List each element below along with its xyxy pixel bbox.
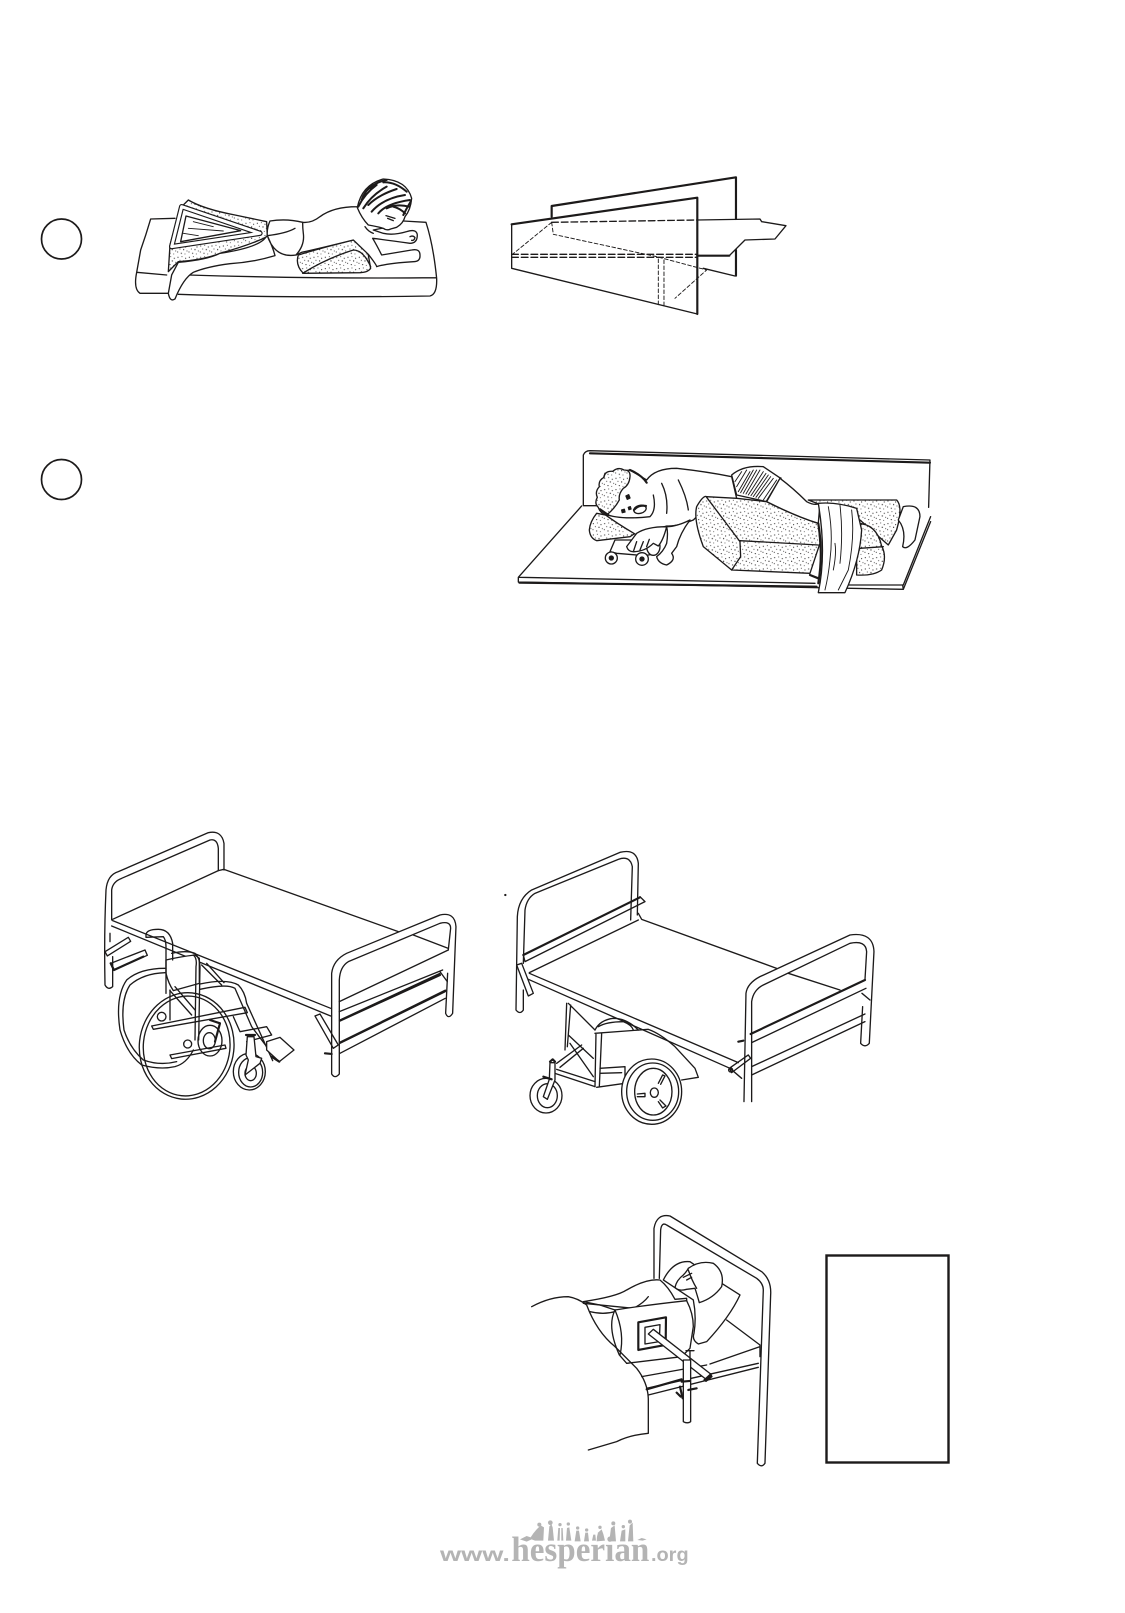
- pillow: [663, 1262, 740, 1344]
- illustration: folded cardboard pattern for abductor: [512, 177, 786, 314]
- head strap bar: [523, 897, 640, 955]
- rear wheel: [622, 1059, 682, 1124]
- square plate: [638, 1317, 666, 1350]
- wheelchair beside first bed: [119, 929, 294, 1104]
- footer logo: hesperian: [439, 1520, 689, 1569]
- front caster: [233, 1053, 265, 1090]
- logo wordmark hesperian: hesperian: [511, 1530, 650, 1569]
- number circle: step 1: [42, 219, 82, 259]
- illustration: boy lying face down on mattress with wedge and leg abductor: [136, 179, 437, 300]
- face: [633, 504, 647, 515]
- boy body and leg: [168, 205, 420, 300]
- child's torso: [597, 468, 737, 535]
- empty outlined box: [826, 1256, 948, 1462]
- back pad: [612, 1301, 693, 1363]
- footboard frame: [332, 914, 456, 1077]
- illustration: bed with wheelchair parked beside it: [105, 832, 456, 1077]
- side-lying board: [583, 451, 930, 507]
- attached trapeze bar: [105, 933, 147, 970]
- folded wheelchair under second bed: [530, 1003, 698, 1124]
- shoulder and body: [583, 1280, 687, 1310]
- foot brace: [729, 1055, 751, 1073]
- bed head frame: [654, 1216, 771, 1466]
- triangular leg abductor: [168, 200, 267, 272]
- curly hair: [596, 469, 630, 515]
- fold lines: [512, 254, 697, 257]
- headboard frame: [105, 832, 224, 988]
- shorts: [732, 466, 781, 502]
- head pillow: [589, 513, 650, 541]
- illustration: person in bed with shoulder positioning pad: [532, 1216, 771, 1466]
- mattress: [627, 1320, 760, 1395]
- small far caster: [198, 1025, 222, 1056]
- far cushion and leg: [808, 500, 900, 545]
- front panel: [512, 224, 697, 314]
- support rod and clamp: [648, 1329, 711, 1379]
- big bolster cushion: [696, 496, 820, 573]
- strap: [818, 503, 862, 593]
- backrest: [166, 955, 199, 991]
- mattress: [136, 218, 437, 297]
- logo text www: www.: [439, 1545, 510, 1566]
- illustration: child side-lying on cushions against a board: [518, 451, 931, 593]
- headboard: [516, 851, 638, 1012]
- number circle: step 2: [42, 460, 82, 500]
- back panel and tab: [552, 177, 736, 219]
- foot rails: [751, 980, 865, 1034]
- fist detail: [410, 236, 415, 240]
- under-bed rails: [339, 950, 448, 1053]
- folding brace: [315, 1014, 338, 1048]
- backrest and seat: [595, 1018, 638, 1030]
- front caster: [530, 1078, 562, 1113]
- illustration: bed with side strap and folded wheelchair under it: [505, 851, 874, 1102]
- footboard: [744, 935, 874, 1102]
- footrest: [267, 1037, 294, 1062]
- head brace: [517, 963, 533, 996]
- blanket: [532, 1297, 648, 1450]
- head: [675, 1262, 722, 1303]
- foot: [898, 506, 920, 548]
- frame uprights: [555, 1003, 595, 1087]
- mattress: [528, 913, 840, 1078]
- toy car: [610, 540, 658, 555]
- wedge cushion: [297, 240, 371, 273]
- rear wheel far: [119, 968, 193, 1068]
- front wheel: [134, 988, 239, 1104]
- logo text org: .org: [651, 1545, 689, 1566]
- mattress and side rail: [112, 869, 448, 1016]
- logo silhouettes of people: [520, 1520, 647, 1542]
- seat struts: [170, 963, 277, 1061]
- arms and hand: [657, 520, 690, 565]
- boy head and hair: [357, 179, 412, 230]
